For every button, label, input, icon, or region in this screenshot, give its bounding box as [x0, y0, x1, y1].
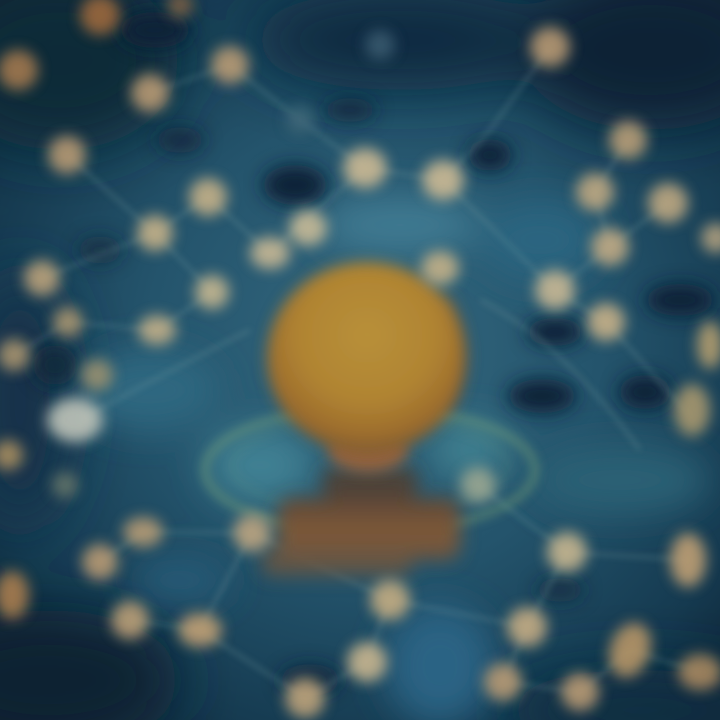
pedestal: brown stand under the sphere [262, 468, 460, 576]
sphere neck: warm join between sphere and stand [328, 428, 408, 472]
sphere: golden globe [267, 262, 467, 454]
background: lighter teal-blue patches [80, 197, 710, 720]
ring: green halo around the sphere base [205, 408, 535, 532]
